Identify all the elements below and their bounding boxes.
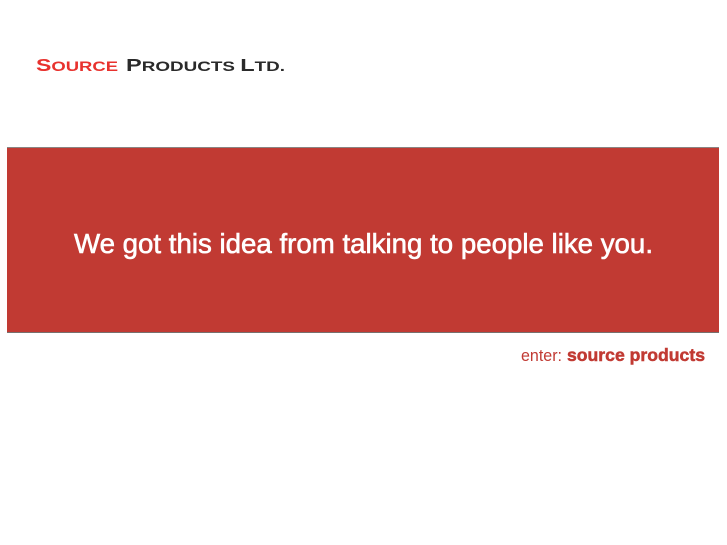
banner message: We got this idea from talking to people like you. (74, 228, 653, 259)
brand words: Products Ltd.: P RODUCTS L TD. (126, 55, 285, 75)
logo heading (36, 55, 285, 75)
enter label: enter: (521, 347, 562, 365)
enter link (521, 345, 705, 365)
brand word: Source: S OURCE (36, 55, 118, 75)
source products link: source products (567, 345, 705, 365)
